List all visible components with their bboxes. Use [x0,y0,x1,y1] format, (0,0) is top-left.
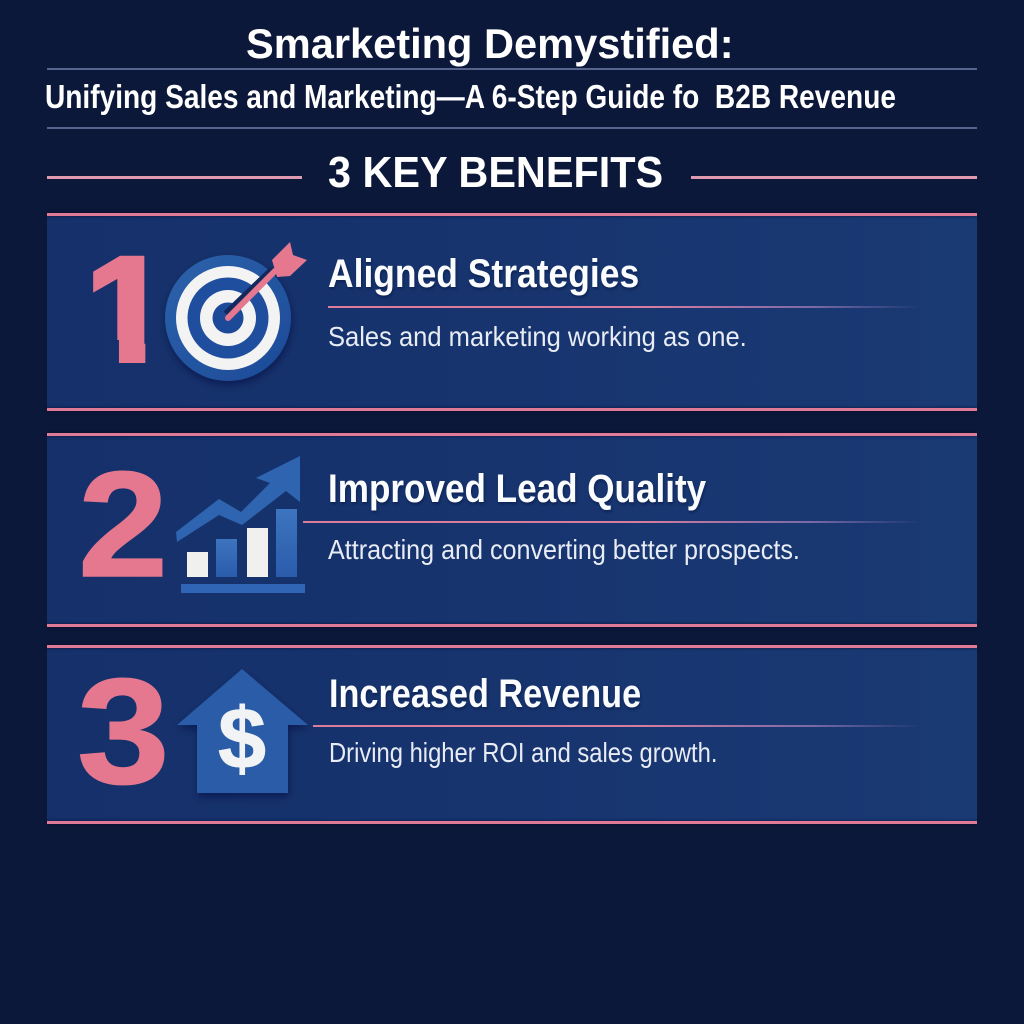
subtitle: Unifying Sales and Marketing—A 6-Step Guide fo B2B Revenue [45,78,896,115]
icon: growth chart [176,456,305,593]
description: Driving higher ROI and sales growth. [329,737,717,768]
heading: Improved Lead Quality [328,467,706,511]
number 2: 2 [78,440,168,608]
title: Smarketing Demystified: [246,20,734,67]
heading: Aligned Strategies [328,252,639,296]
heading: Increased Revenue [329,672,641,716]
description: Attracting and converting better prospects. [328,534,800,565]
number 1: 1 [81,225,173,393]
description: Sales and marketing working as one. [328,321,747,352]
icon: dollar arrow [177,669,308,799]
section heading [47,148,977,197]
number 3: 3 [77,647,170,815]
panel: aligned strategies [47,213,977,411]
panel: improved lead quality [47,433,977,627]
icon: dollar arrow: $ [218,691,266,787]
panel: increased revenue [47,645,977,824]
icon: target with arrow [164,242,307,387]
section heading: 3 KEY BENEFITS [328,148,663,197]
